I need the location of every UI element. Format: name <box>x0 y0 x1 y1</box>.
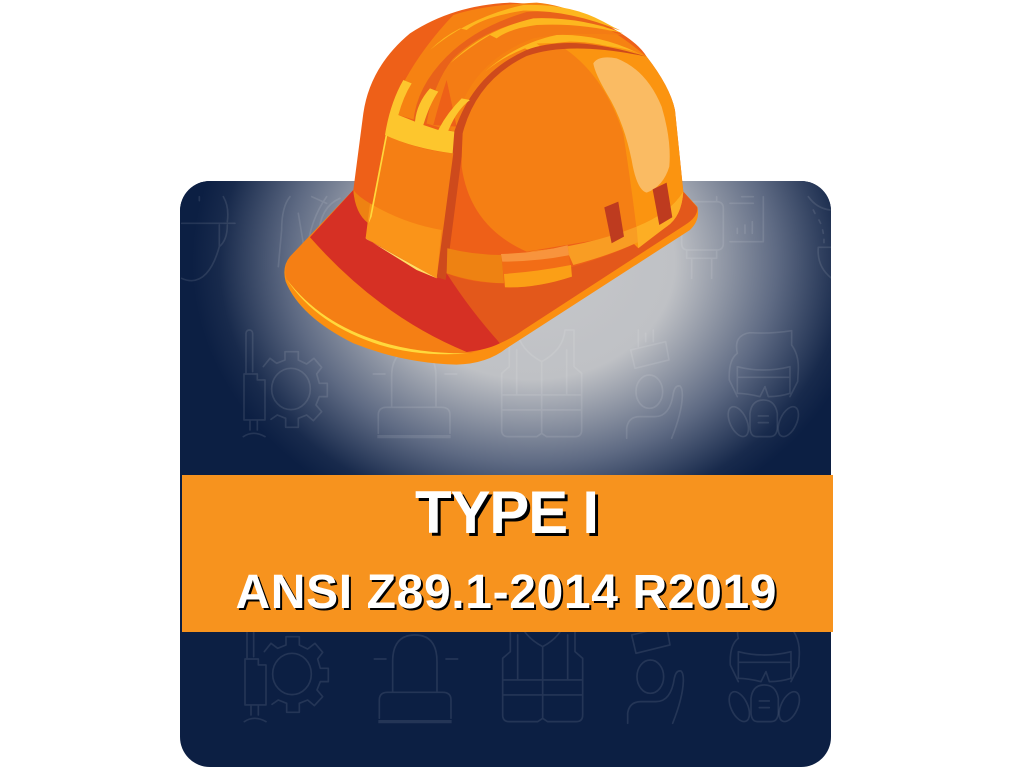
brim dark right section <box>447 192 697 343</box>
dark ridge stripe <box>437 43 647 280</box>
reflective highlight <box>593 57 670 193</box>
brim underside <box>284 190 698 365</box>
left band edge <box>353 190 370 223</box>
subheading: standard: ANSI Z89.1-2014 R2019 <box>238 568 778 621</box>
brim highlight <box>287 279 470 354</box>
dome ridge: middle <box>427 23 623 131</box>
panel: navy background <box>180 181 831 767</box>
dome ridges base <box>398 3 647 132</box>
dome ridge shadow: outer <box>413 12 620 123</box>
buckle <box>501 245 572 287</box>
yellow ridge band 3 <box>485 35 648 72</box>
subheading: standard: ANSI Z89.1-2014 R2019 <box>236 566 776 619</box>
icons: lower row of safety symbols <box>244 615 804 725</box>
yellow ridge band 2 <box>450 18 623 63</box>
icons: upper row of safety symbols <box>182 197 832 440</box>
infographic <box>180 2 833 767</box>
head band <box>527 192 683 265</box>
yellow ventilation frame <box>385 80 470 153</box>
heading: type: TYPE I <box>418 482 602 549</box>
front plate <box>366 135 453 278</box>
dome <box>353 3 683 283</box>
brim top <box>285 190 697 353</box>
dome shell lighter side <box>537 43 683 248</box>
brim red band <box>310 190 500 352</box>
heading: type: TYPE I <box>415 479 599 546</box>
banner <box>182 475 833 632</box>
yellow ridge band 1 <box>430 5 620 50</box>
dome ridge shadow: inner <box>433 80 457 127</box>
strap slots <box>604 202 624 243</box>
icon: orange hard hat <box>284 3 698 365</box>
dome face <box>462 47 637 252</box>
